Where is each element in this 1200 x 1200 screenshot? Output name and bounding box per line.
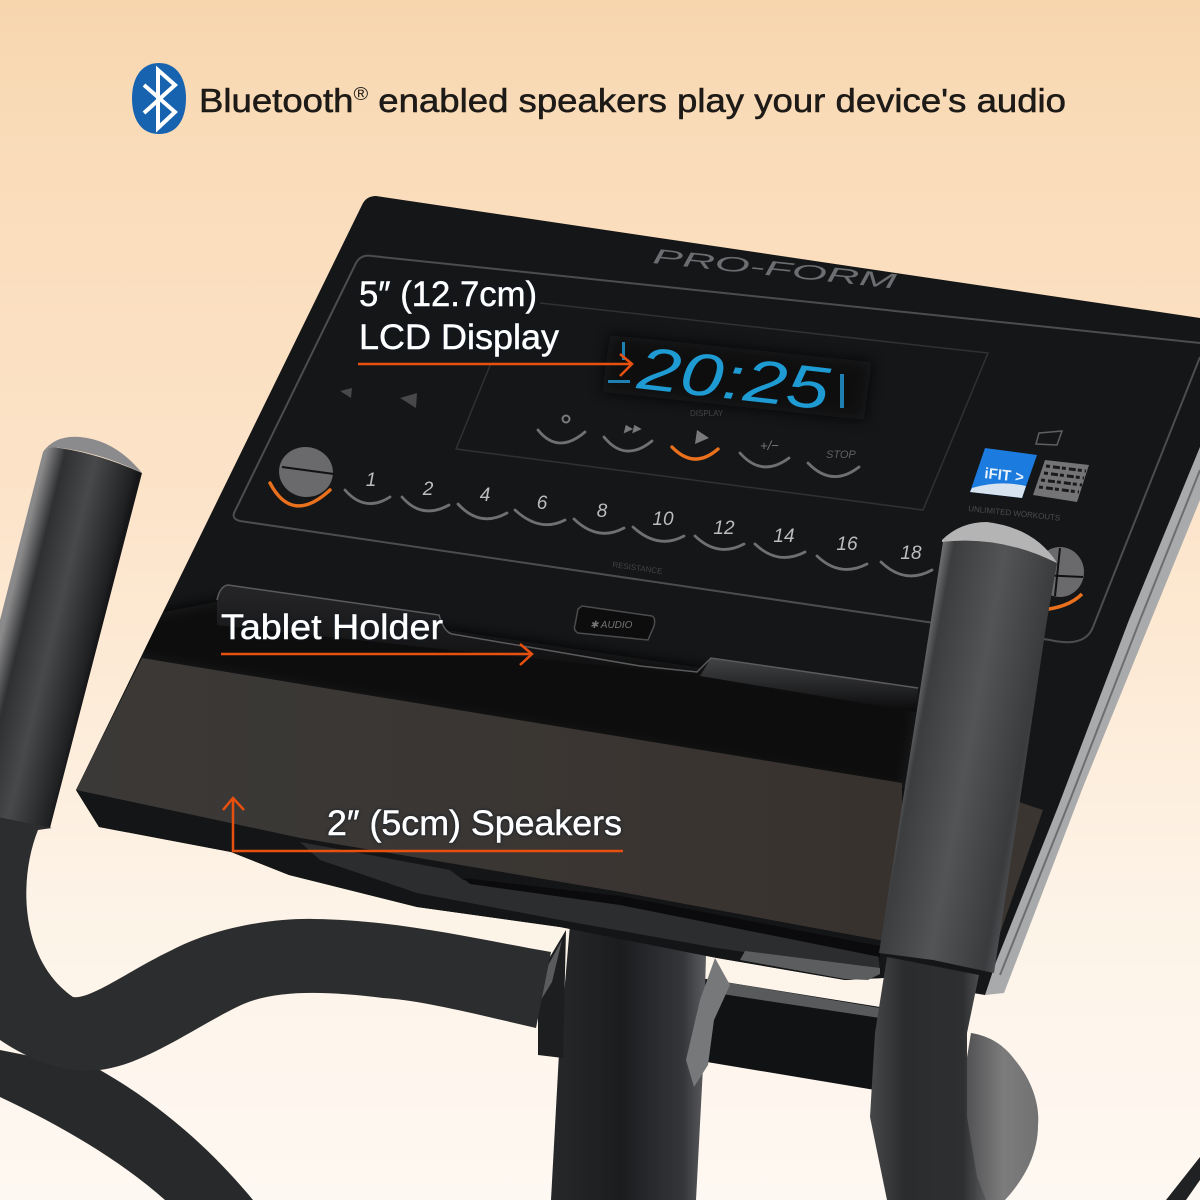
right lower tube (870, 957, 986, 1200)
heading text: Bluetooth (199, 82, 338, 119)
audio port (574, 606, 655, 640)
right handlebar (870, 522, 1057, 1200)
resistance numbers: 18 (900, 543, 922, 564)
callout: Speakers (223, 798, 623, 851)
left grip cap (43, 437, 142, 473)
callout: LCD display: LCD Display (359, 318, 560, 357)
button labels: STOP (826, 449, 856, 461)
speaker grille (76, 658, 902, 943)
console silver side (985, 447, 1200, 995)
display frame (456, 303, 988, 510)
icon: Bluetooth logo (132, 63, 186, 134)
console outline (234, 256, 1200, 642)
callout: LCD display (358, 275, 632, 376)
button labels: RESISTANCE (612, 560, 663, 576)
right foreground tube (1166, 1157, 1200, 1200)
right grip (879, 541, 1057, 973)
center column (551, 925, 706, 1200)
callout: LCD display: 5″ (12.7cm) (359, 275, 537, 314)
arrow: to speakers (223, 798, 623, 851)
lower left arc tube (0, 1050, 253, 1200)
arrow: to LCD (358, 354, 632, 376)
LCD display readout: 20:25 (633, 334, 834, 423)
left tube (0, 817, 551, 1071)
panel: console (76, 196, 1200, 995)
callout: Tablet Holder (221, 608, 532, 665)
resistance numbers: 4 (480, 485, 490, 506)
incline dial right (1036, 547, 1084, 610)
cast icon (1036, 431, 1062, 445)
resistance numbers: 2 (422, 479, 434, 500)
heading text: ® (353, 84, 368, 104)
resistance numbers: 1 (366, 470, 376, 491)
right cross tube (695, 978, 880, 1090)
heading text: enabled speakers play your device's audio (368, 82, 1066, 119)
button labels: +/− (760, 438, 779, 453)
resistance numbers: 8 (597, 501, 608, 522)
callout: Speakers: 2″ (5cm) Speakers (327, 804, 622, 843)
LCD display readout (602, 334, 872, 423)
heading: Bluetooth speakers (132, 63, 1066, 134)
left bracket (538, 930, 566, 1058)
tablet holder lip (217, 585, 918, 712)
brand logo: PRO-FORM (651, 245, 899, 294)
rear gray tube (960, 1033, 1038, 1200)
resistance numbers: 6 (537, 493, 548, 514)
iFIT badge: iFIT > (984, 465, 1025, 486)
workouts label: UNLIMITED WORKOUTS (968, 504, 1061, 523)
speed dial left (270, 443, 336, 506)
arrow: to tablet holder (221, 644, 532, 665)
button labels: DISPLAY (690, 409, 724, 418)
console body (76, 196, 1200, 995)
resistance numbers: 12 (713, 518, 735, 539)
QR code (1033, 460, 1089, 502)
glossy black lower deck (120, 598, 918, 790)
button labels (340, 388, 856, 576)
audio port: ✱ AUDIO (590, 620, 633, 631)
left grip (0, 447, 142, 828)
callout: Tablet Holder: Tablet Holder (221, 608, 443, 647)
right bracket (686, 958, 730, 1087)
button labels: ▶▶ (623, 423, 642, 435)
resistance numbers: 10 (652, 509, 674, 530)
underside strip (76, 790, 883, 980)
resistance numbers: 16 (836, 534, 858, 555)
resistance numbers (366, 470, 922, 564)
iFIT badge (970, 448, 1037, 498)
right grip cap (942, 522, 1057, 563)
speaker grille right end (985, 802, 1043, 942)
control buttons (345, 430, 932, 576)
left handlebar (0, 437, 551, 1071)
frame tubes (0, 925, 1200, 1200)
resistance numbers: 14 (773, 526, 795, 547)
